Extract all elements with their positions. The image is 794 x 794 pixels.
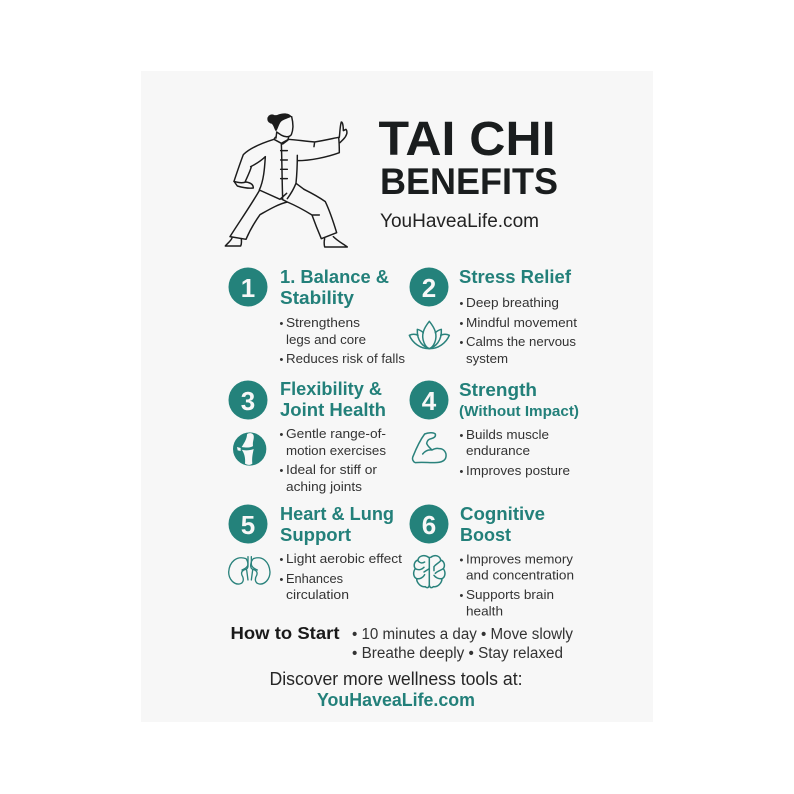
heading 3: Flexibility &	[280, 378, 382, 399]
icon: kidneys	[229, 557, 270, 584]
panel: strength	[410, 379, 579, 478]
bullets 2	[460, 295, 577, 366]
bullets 6: and concentration	[466, 568, 574, 582]
bullets 6: •	[460, 590, 464, 602]
heading 4: Strength	[459, 379, 537, 400]
bullets 5: Light aerobic effect	[286, 551, 402, 566]
bullets 5: •	[280, 574, 284, 586]
bullets 5: circulation	[286, 587, 349, 602]
bullets 1: Strengthens	[286, 315, 361, 330]
bullets 6: •	[460, 554, 464, 566]
bullets 5	[280, 551, 402, 602]
badge 3: 3	[241, 386, 255, 416]
bullets 3	[280, 426, 387, 494]
bullets 4: •	[460, 466, 464, 478]
badge 4	[410, 380, 448, 420]
heading 6: Cognitive	[460, 503, 545, 524]
bullets 1: •	[280, 318, 284, 330]
icon: brain	[414, 556, 445, 588]
bullets 3: •	[280, 465, 284, 477]
bullets 1: Reduces risk of falls	[286, 351, 406, 366]
badge 2: 2	[422, 273, 436, 303]
bullets 3: Ideal for stiff or	[286, 462, 378, 477]
how to start heading: How to Start	[230, 623, 340, 643]
bullets 6	[460, 552, 574, 618]
heading 3	[280, 378, 386, 420]
bullets 5: Enhances	[286, 571, 343, 586]
badge 6	[410, 504, 448, 544]
bullets 5: •	[280, 554, 284, 566]
panel: flexibility and joint health	[228, 378, 387, 494]
heading 4	[459, 379, 579, 420]
icon: lotus	[409, 321, 449, 349]
heading 3: Joint Health	[280, 399, 386, 420]
heading 5: Heart & Lung	[280, 503, 394, 524]
badge 2	[410, 268, 448, 306]
heading 6: Boost	[460, 524, 511, 545]
footer call to action	[270, 669, 522, 710]
bullets 3: motion exercises	[286, 443, 387, 458]
how to start tips: • 10 minutes a day • Move slowly	[352, 626, 573, 643]
heading 1: 1. Balance &	[280, 266, 389, 287]
bullets 2: •	[460, 337, 464, 349]
heading 4: (Without Impact)	[459, 403, 579, 420]
bullets 6: Improves memory	[466, 552, 574, 566]
bullets 4: Builds muscle	[466, 427, 549, 442]
footer call to action: Discover more wellness tools at:	[270, 669, 522, 689]
badge 1	[228, 268, 268, 306]
bullets 2: •	[460, 318, 464, 330]
title: TAI CHI	[378, 113, 556, 166]
heading 5	[280, 503, 394, 545]
bullets 3: aching joints	[286, 479, 363, 494]
badge 5: 5	[241, 510, 255, 540]
bullets 2: Mindful movement	[466, 315, 577, 330]
icon: flexed arm	[412, 433, 446, 463]
bullets 6: health	[466, 604, 503, 618]
heading 5: Support	[280, 524, 351, 545]
bullets 4	[460, 427, 570, 478]
panel: balance and stability	[228, 266, 406, 366]
bullets 1: legs and core	[286, 332, 366, 347]
badge 1: 1	[241, 273, 255, 303]
bullets 6: Supports brain	[466, 587, 554, 602]
bullets 4: •	[460, 430, 464, 442]
badge 6: 6	[422, 510, 436, 540]
how to start	[230, 623, 573, 662]
bullets 2: Deep breathing	[466, 295, 559, 310]
title: YouHaveaLife.com	[380, 211, 539, 232]
heading 6	[460, 503, 545, 545]
bullets 2: Calms the nervous	[466, 334, 576, 349]
bullets 3: •	[280, 429, 284, 441]
bullets 4: endurance	[466, 443, 530, 458]
badge 5	[228, 504, 268, 544]
icon: knee joint	[233, 432, 266, 466]
heading 1: Stability	[280, 287, 355, 308]
bullets 2: •	[460, 298, 464, 310]
bullets 1	[280, 315, 406, 366]
bullets 2: system	[466, 351, 508, 366]
heading 2: Stress Relief	[459, 266, 572, 287]
panel: cognitive boost	[410, 503, 574, 618]
title	[378, 113, 558, 232]
footer call to action: YouHaveaLife.com	[317, 689, 475, 710]
illustration: tai chi figure	[225, 113, 347, 247]
badge 3	[228, 380, 268, 420]
badge 4: 4	[422, 386, 437, 416]
how to start tips: • Breathe deeply • Stay relaxed	[352, 645, 563, 662]
panel: heart and lung support	[228, 503, 402, 602]
poster panel	[141, 71, 653, 722]
how to start tips	[352, 626, 573, 662]
bullets 3: Gentle range-of-	[286, 426, 386, 441]
title: BENEFITS	[380, 161, 558, 202]
heading 1	[280, 266, 389, 308]
bullets 4: Improves posture	[466, 463, 570, 478]
panel: stress relief	[409, 266, 577, 366]
bullets 1: •	[280, 354, 284, 366]
